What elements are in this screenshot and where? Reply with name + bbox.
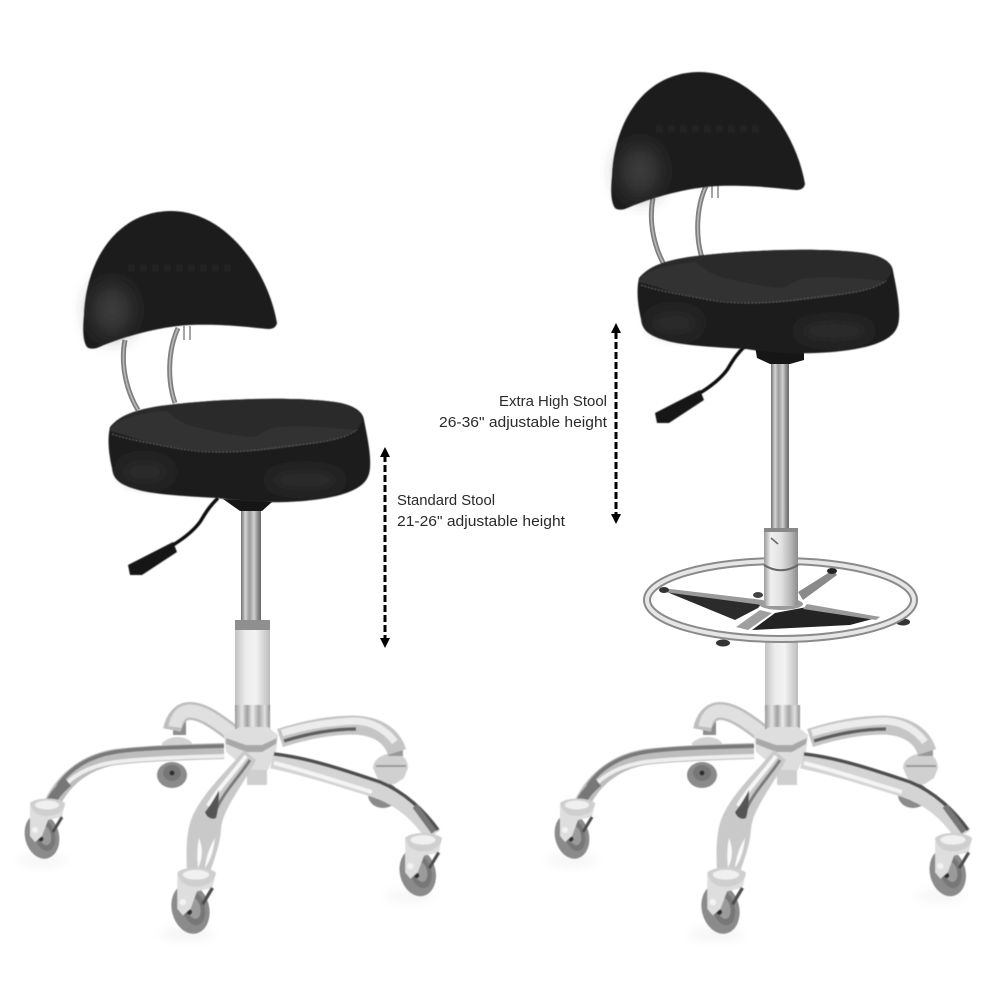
foot ring <box>647 561 914 639</box>
seat mount <box>755 346 804 364</box>
gas lift column <box>235 505 270 711</box>
height lever <box>128 498 218 575</box>
lower column <box>765 636 798 711</box>
height lever <box>655 346 745 423</box>
seat <box>638 250 899 353</box>
five-star chrome base <box>546 705 972 939</box>
label: standard stool: 21-26" adjustable height <box>397 514 565 530</box>
label: extra high stool <box>439 394 607 431</box>
seat <box>109 399 370 502</box>
arrow: extra high stool height <box>611 323 621 524</box>
standard stool <box>16 211 442 939</box>
backrest <box>611 72 805 210</box>
backrest rods <box>651 184 718 268</box>
foot ring support <box>659 568 910 646</box>
extra high stool <box>546 72 972 939</box>
arrow: standard stool height <box>380 447 390 648</box>
five-star chrome base <box>16 705 442 939</box>
label: standard stool <box>397 493 565 530</box>
label: extra high stool: Extra High Stool <box>499 394 607 410</box>
upper lift column <box>771 360 789 532</box>
label: extra high stool: 26-36" adjustable height <box>439 415 607 431</box>
column collar <box>764 528 798 606</box>
seat mount <box>223 499 272 511</box>
backrest rods <box>123 326 190 410</box>
backrest <box>83 211 277 349</box>
label: standard stool: Standard Stool <box>397 493 495 509</box>
